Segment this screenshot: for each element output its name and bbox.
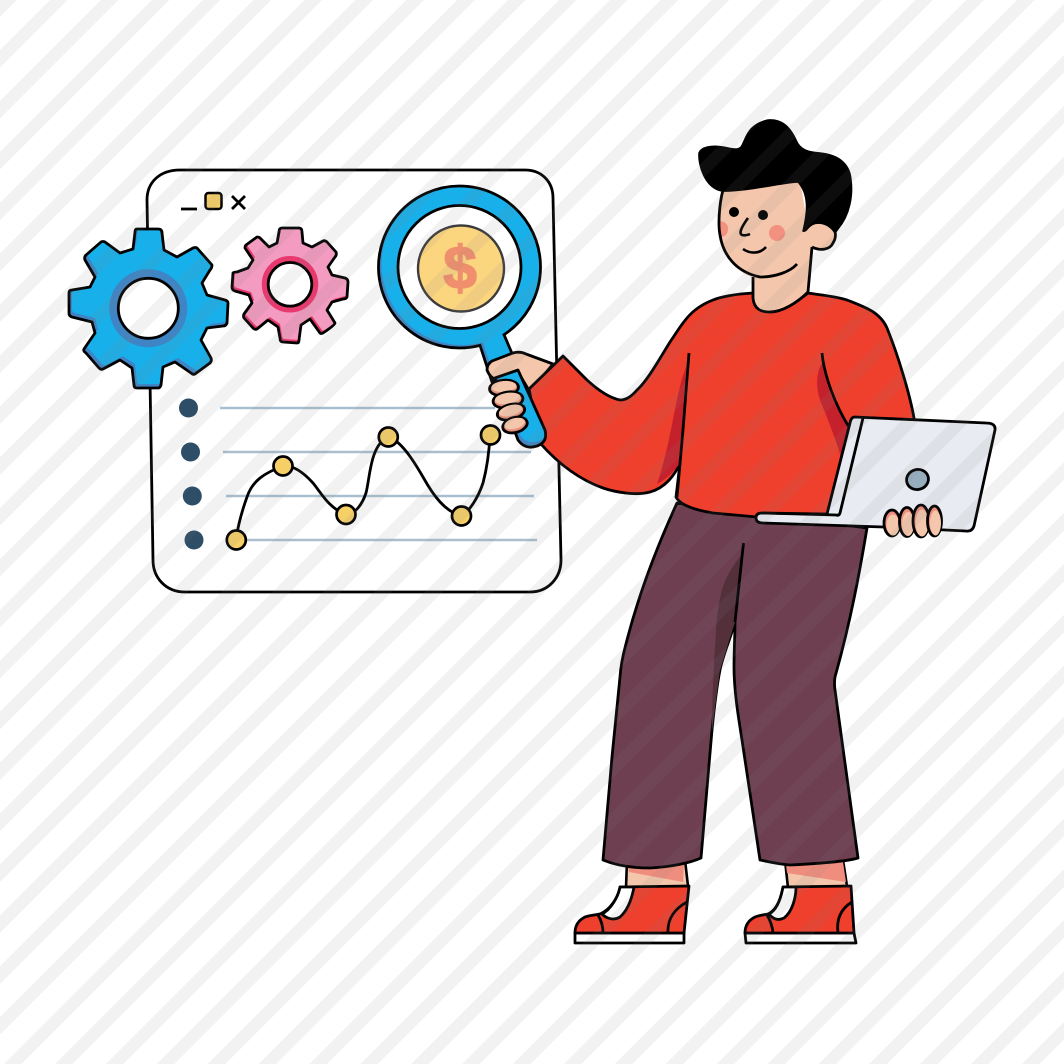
laptop hinge <box>762 418 863 515</box>
chart curve <box>236 435 490 539</box>
icon: blue gear <box>69 225 231 388</box>
ankles <box>626 860 847 888</box>
right shoe <box>745 886 856 943</box>
fingers on laptop <box>884 505 942 537</box>
chart data points <box>227 426 500 550</box>
cheeks <box>720 221 785 241</box>
head and neck <box>699 120 852 312</box>
line chart <box>179 398 537 550</box>
dollar coin <box>418 226 504 312</box>
laptop <box>756 417 995 531</box>
list bullets <box>179 398 204 550</box>
magnifier handle lower part <box>495 365 548 447</box>
palm and thumb <box>487 352 553 392</box>
trouser shadow <box>712 553 743 730</box>
chart grid lines <box>220 408 537 540</box>
icon: pink gear <box>232 225 350 343</box>
dollar sign: $ <box>443 234 477 302</box>
hair <box>699 120 852 233</box>
trousers <box>603 503 867 868</box>
right arm shadow <box>817 363 850 460</box>
eyes <box>729 207 768 220</box>
person <box>487 120 995 943</box>
face outline <box>719 190 835 312</box>
dashboard window panel <box>147 170 561 592</box>
left shoe <box>575 886 689 943</box>
fingers on handle <box>489 379 529 435</box>
left arm shadow <box>657 367 686 484</box>
red sweater <box>529 293 914 525</box>
skin <box>719 180 835 312</box>
window controls <box>181 193 245 209</box>
nose and mouth <box>741 218 766 253</box>
trouser crease <box>735 543 744 622</box>
sweater fold lines <box>677 353 849 497</box>
laptop logo <box>904 467 931 492</box>
icon: magnifying glass with dollar coin <box>379 183 544 382</box>
